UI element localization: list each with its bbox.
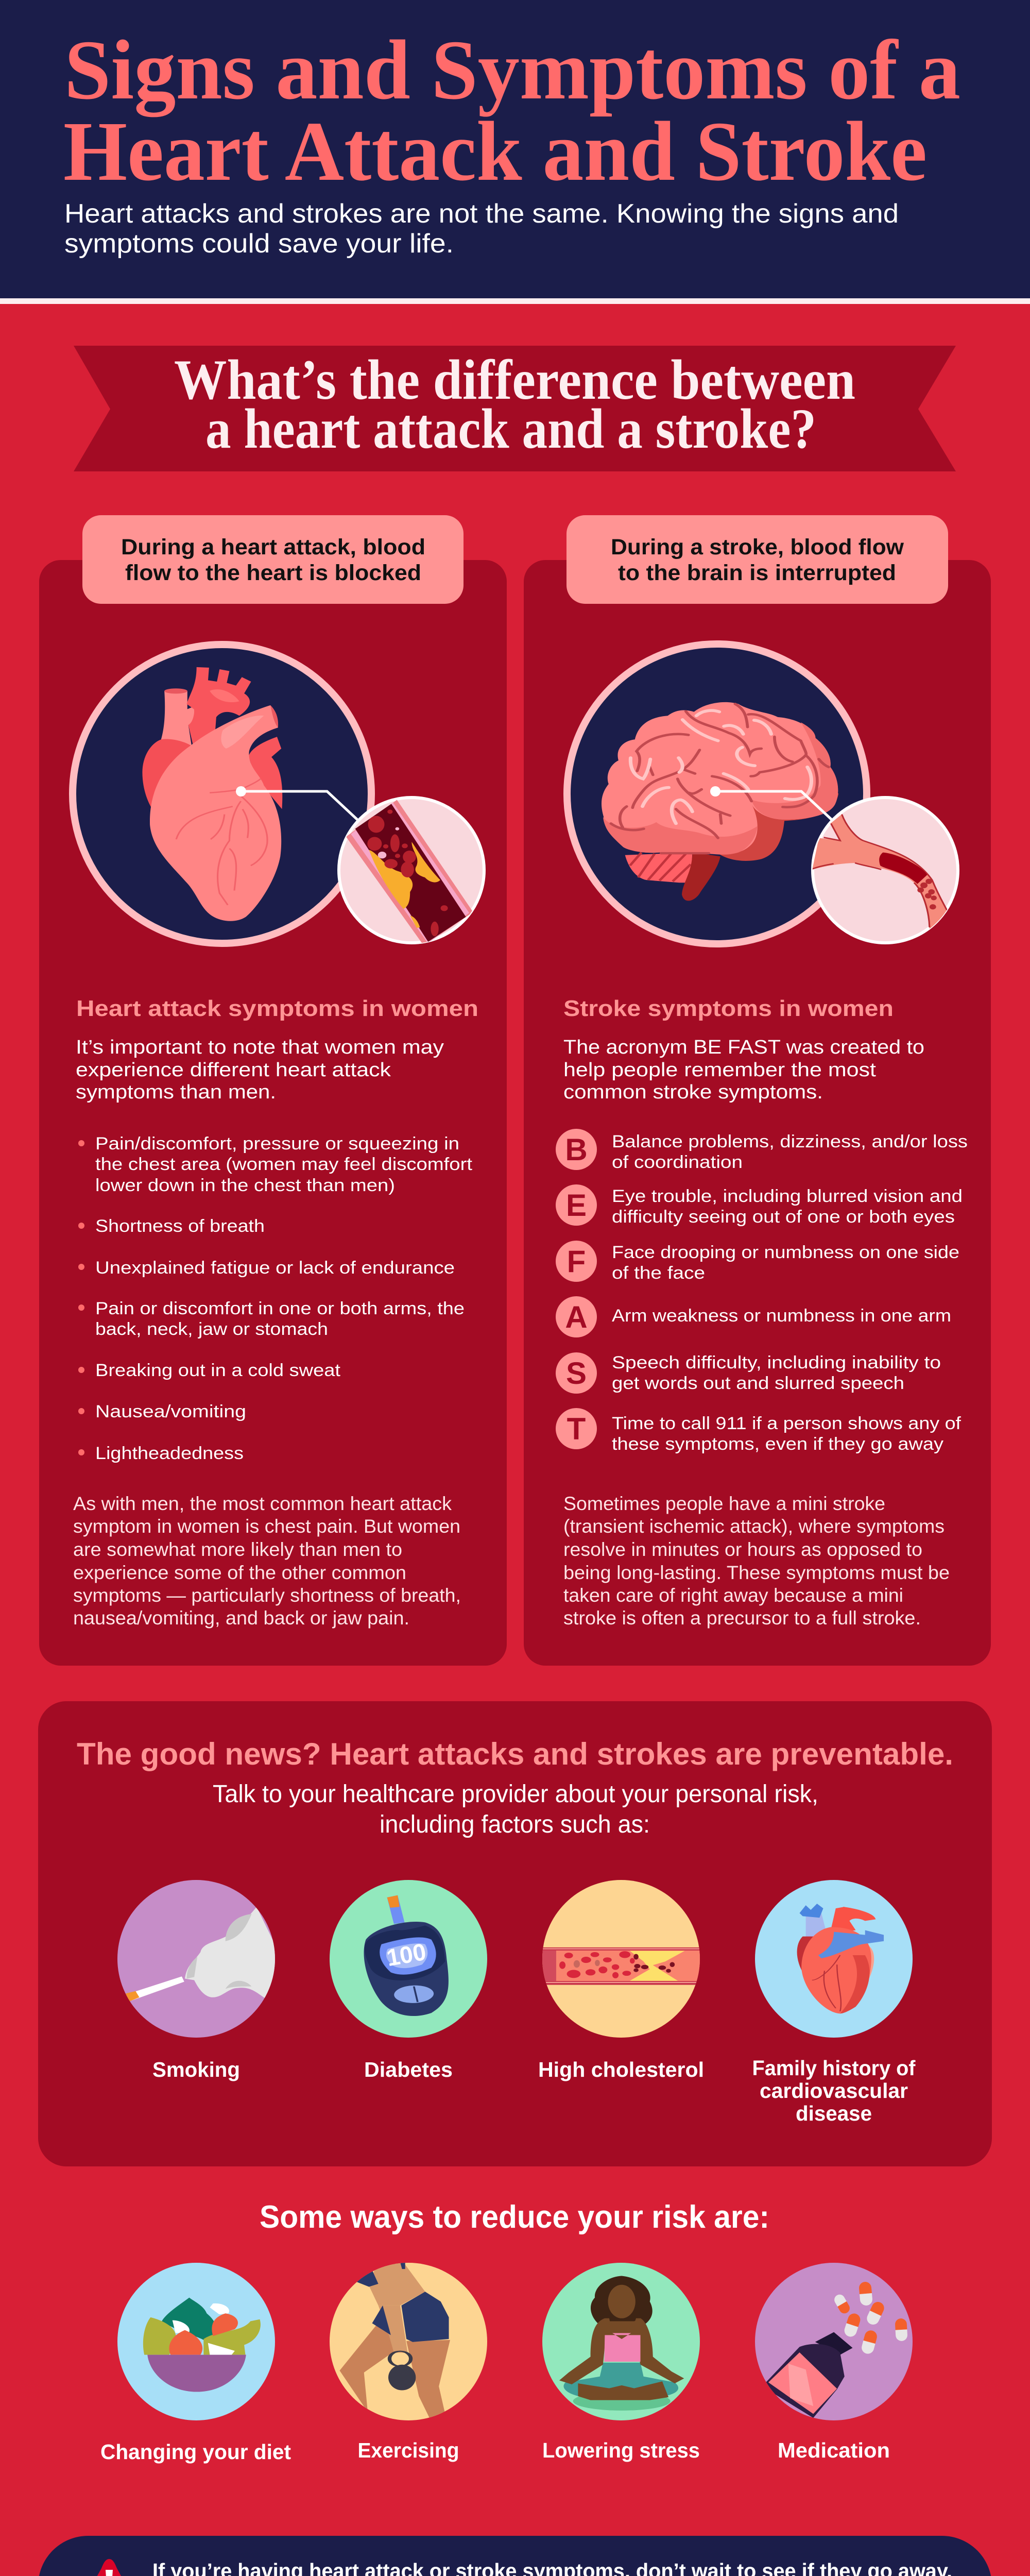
risk factor: family history: Family history of <box>752 2056 916 2080</box>
BE FAST descriptions: get words out and slurred speech <box>612 1374 904 1393</box>
intro: talk to your provider: Talk to your healthcare provider about your personal risk, <box>213 1781 818 1808</box>
ribbon heading: What’s the difference between <box>174 348 855 411</box>
symptom list: Lightheadedness <box>95 1444 244 1463</box>
letter B <box>556 1129 597 1170</box>
letter T <box>556 1408 597 1449</box>
intro text <box>563 1037 924 1103</box>
letter F: F <box>567 1244 586 1279</box>
BE FAST descriptions: Balance problems, dizziness, and/or loss <box>612 1132 968 1151</box>
warning banner <box>38 2536 992 2576</box>
closing text: heart attack: As with men, the most common heart attack <box>73 1493 452 1514</box>
risk factor: family history <box>752 1880 916 2125</box>
ribbon heading: a heart attack and a stroke? <box>205 397 816 460</box>
letter S: S <box>566 1356 587 1391</box>
symptom list: the chest area (women may feel discomfort <box>95 1155 473 1174</box>
closing text: stroke: taken care of right away because a mini <box>563 1585 903 1606</box>
BE FAST descriptions: Time to call 911 if a person shows any of <box>612 1414 962 1433</box>
risk factor: family history: cardiovascular <box>760 2079 908 2103</box>
intro text: common stroke symptoms. <box>563 1081 823 1103</box>
panel: prevention <box>38 1701 992 2166</box>
symptom list: Unexplained fatigue or lack of endurance <box>95 1258 455 1278</box>
symptom list: Pain or discomfort in one or both arms, the <box>95 1299 465 1318</box>
meter reading: 100 <box>385 1938 428 1971</box>
callout: stroke definition <box>566 515 948 604</box>
BE FAST descriptions: difficulty seeing out of one or both eyes <box>612 1207 955 1227</box>
closing text: stroke: resolve in minutes or hours as opposed to <box>563 1539 922 1560</box>
symptom list: Nausea/vomiting <box>95 1402 246 1421</box>
title: Heart Attack and Stroke <box>63 104 927 198</box>
closing text: heart attack: are somewhat more likely than men to <box>73 1539 402 1560</box>
letter B: B <box>565 1132 588 1167</box>
symptom list: lower down in the chest than men) <box>95 1176 395 1195</box>
ribbon heading <box>74 346 956 471</box>
intro: talk to your provider: including factors such as: <box>380 1811 650 1838</box>
intro text: experience different heart attack <box>76 1059 391 1081</box>
letter E <box>556 1184 597 1226</box>
icon: brain in circle <box>567 644 867 944</box>
callout: stroke definition: During a stroke, blood flow <box>611 535 904 560</box>
BE FAST descriptions: Eye trouble, including blurred vision and <box>612 1187 963 1206</box>
risk factor: high cholesterol: High cholesterol <box>538 2058 704 2081</box>
closing text: heart attack: symptoms — particularly shortness of breath, <box>73 1585 461 1606</box>
symptom list <box>78 1134 473 1463</box>
symptom list: Pain/discomfort, pressure or squeezing in <box>95 1134 459 1154</box>
risk factor: high cholesterol <box>538 1880 706 2081</box>
icon: clotted vessel inset <box>812 798 958 943</box>
risk factor: family history: disease <box>796 2102 872 2125</box>
letter T: T <box>567 1412 586 1446</box>
header band <box>0 0 1030 304</box>
subtitle <box>64 199 899 259</box>
symptom list: Shortness of breath <box>95 1216 265 1236</box>
callout: heart attack definition: flow to the heart is blocked <box>125 561 421 585</box>
callout: heart attack definition: During a heart attack, blood <box>121 535 425 560</box>
letter A: A <box>565 1300 588 1334</box>
subtitle: symptoms could save your life. <box>64 229 454 259</box>
closing text: heart attack <box>73 1493 461 1629</box>
letter S <box>556 1352 597 1394</box>
intro text: symptoms than men. <box>76 1081 276 1103</box>
BE FAST descriptions: these symptoms, even if they go away <box>612 1434 943 1454</box>
heading: heart attack symptoms: Heart attack symptoms in women <box>76 996 478 1021</box>
BE FAST descriptions: Speech difficulty, including inability to <box>612 1353 941 1372</box>
closing text: heart attack: nausea/vomiting, and back or jaw pain. <box>73 1607 409 1629</box>
icon: heart in circle <box>73 645 484 1629</box>
pills <box>832 2281 908 2355</box>
panel: heart attack <box>0 515 1030 2576</box>
letter E: E <box>566 1188 587 1223</box>
closing text: stroke: stroke is often a precursor to a full stroke. <box>563 1607 921 1629</box>
BE FAST descriptions: of coordination <box>612 1153 743 1172</box>
intro: talk to your provider <box>213 1781 818 1838</box>
prevention: medication: Medication <box>778 2438 890 2462</box>
heading: stroke symptoms: Stroke symptoms in women <box>563 996 894 1021</box>
BE FAST descriptions: Arm weakness or numbness in one arm <box>612 1306 951 1326</box>
risk factor: diabetes <box>330 1880 487 2081</box>
title <box>63 23 960 198</box>
BE FAST descriptions: Face drooping or numbness on one side <box>612 1243 959 1262</box>
subtitle: Heart attacks and strokes are not the same. Knowing the signs and <box>64 199 899 229</box>
closing text: stroke: Sometimes people have a mini stroke <box>563 1493 885 1514</box>
panel: stroke <box>524 515 991 1666</box>
symptom list: Breaking out in a cold sweat <box>95 1361 341 1380</box>
intro text: It’s important to note that women may <box>76 1037 444 1058</box>
intro text <box>76 1037 444 1103</box>
closing text: stroke: being long-lasting. These symptoms must be <box>563 1562 950 1583</box>
letter F <box>556 1241 597 1282</box>
prevention: changing your diet: Changing your diet <box>100 2440 291 2464</box>
leader line: heart to artery <box>236 786 357 820</box>
closing text: heart attack: experience some of the other common <box>73 1562 406 1583</box>
leader line: brain to vessel <box>710 786 832 820</box>
icon: blocked artery inset <box>339 798 484 946</box>
closing text: stroke <box>563 1493 950 1629</box>
letter A <box>556 1296 597 1337</box>
heading: ways to reduce risk: Some ways to reduce your risk are: <box>260 2199 769 2235</box>
title: Signs and Symptoms of a <box>64 23 960 117</box>
heading: good news: The good news? Heart attacks and strokes are preventable. <box>77 1737 953 1771</box>
prevention: lowering stress <box>542 2263 700 2462</box>
prevention: exercising <box>330 2262 487 2462</box>
callout: heart attack definition <box>82 515 464 604</box>
symptom list: back, neck, jaw or stomach <box>95 1319 328 1339</box>
risk factor: smoking: Smoking <box>152 2058 240 2081</box>
closing text: heart attack: symptom in women is chest pain. But women <box>73 1516 460 1537</box>
intro text: help people remember the most <box>563 1059 876 1081</box>
intro text: The acronym BE FAST was created to <box>563 1037 924 1058</box>
prevention: lowering stress: Lowering stress <box>542 2438 700 2462</box>
BE FAST descriptions: of the face <box>612 1263 705 1283</box>
prevention: exercising: Exercising <box>357 2438 459 2462</box>
callout: stroke definition: to the brain is interrupted <box>618 561 896 585</box>
BE FAST descriptions <box>612 1132 968 1454</box>
prevention: changing your diet <box>100 2263 291 2464</box>
prevention: medication <box>755 2263 913 2462</box>
risk factor: smoking <box>117 1880 282 2081</box>
BE FAST list <box>556 1129 968 1454</box>
risk factor: diabetes: Diabetes <box>364 2058 453 2081</box>
closing text: stroke: (transient ischemic attack), where symptoms <box>563 1516 945 1537</box>
icon: warning triangle <box>82 2559 136 2576</box>
